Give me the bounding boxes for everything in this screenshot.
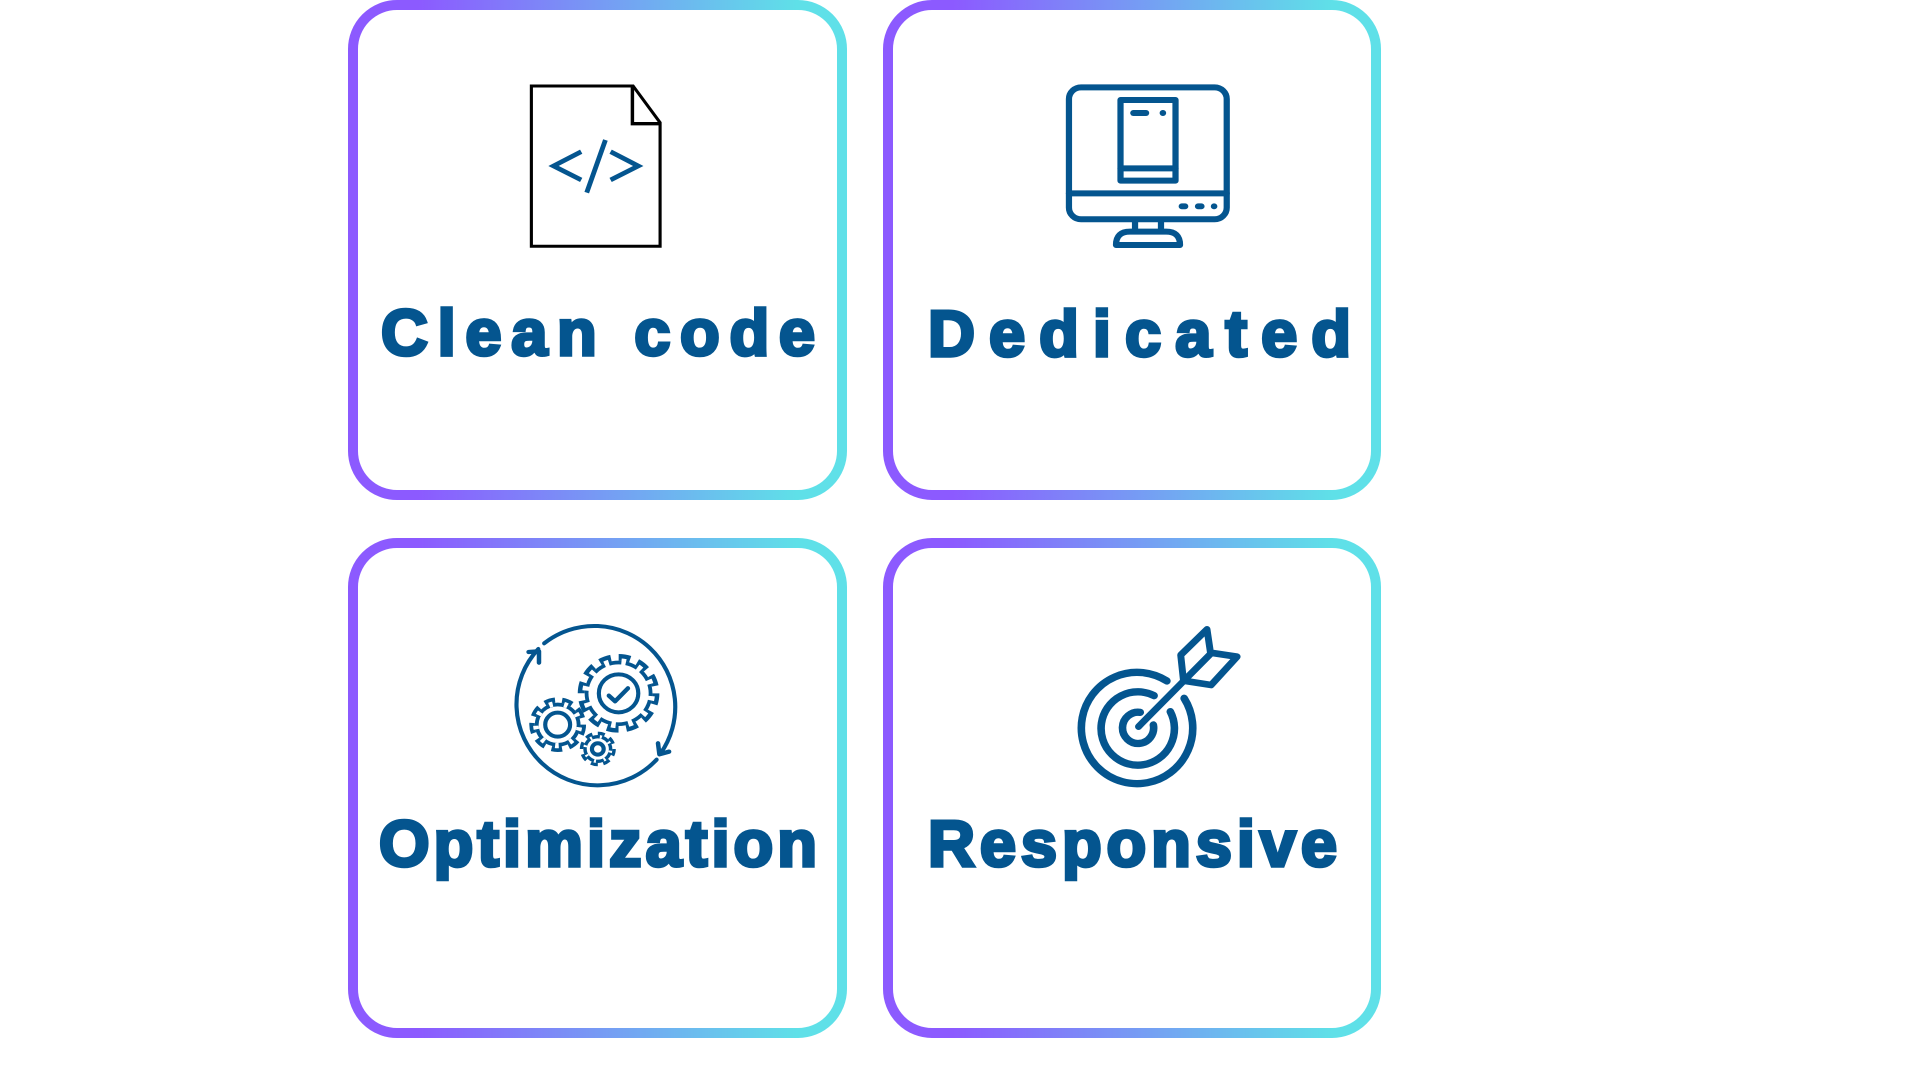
heading: dedicated: Dedicated [928, 297, 1351, 370]
card border: responsive [888, 543, 1376, 1033]
panel: dedicated [888, 5, 1376, 495]
icon: desktop monitor with phone [1069, 87, 1227, 245]
heading: optimization: Optimization [379, 807, 817, 880]
icon: gears in cycle arrows [516, 626, 675, 785]
panel: optimization [353, 543, 842, 1033]
large gear [581, 657, 656, 729]
panel: responsive [888, 543, 1376, 1033]
panel: clean code [353, 5, 842, 495]
card border: dedicated [888, 5, 1376, 495]
heading: clean code: Clean code [381, 296, 815, 369]
icon: target with arrow [1081, 629, 1237, 784]
icon: code document [531, 86, 660, 246]
small gear [582, 733, 614, 765]
card border: clean code [353, 5, 842, 495]
card border: optimization [353, 543, 842, 1033]
medium gear [532, 700, 583, 749]
heading: responsive: Responsive [928, 807, 1337, 880]
